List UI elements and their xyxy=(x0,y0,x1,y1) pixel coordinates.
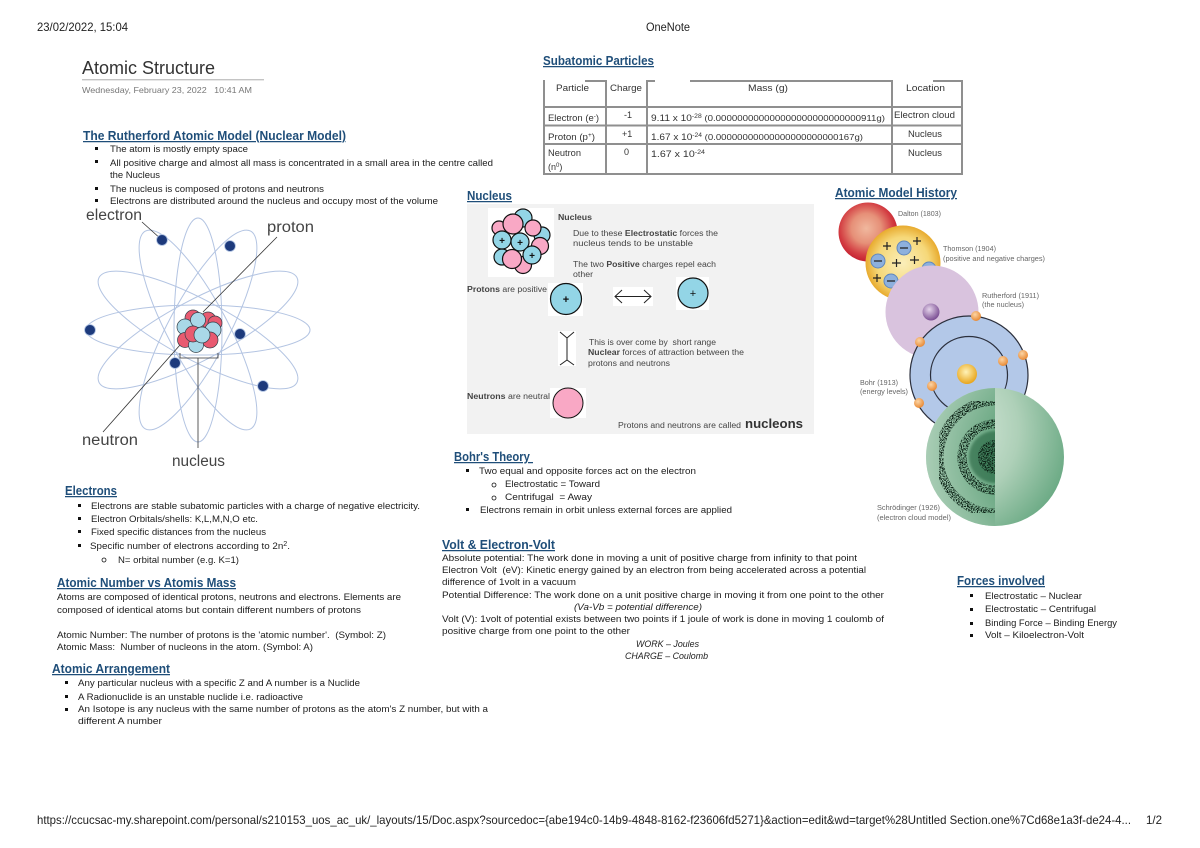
page footer: 1/2 xyxy=(1146,813,1162,827)
table of particles: ) xyxy=(592,132,595,142)
panel: nucleus explanation xyxy=(467,204,814,434)
section: atomic arrangement: A Radionuclide is an unstable nuclide i.e. radioactive xyxy=(78,692,303,703)
icon: nucleus cluster: + xyxy=(499,236,505,247)
page header: 23/02/2022, 15:04 xyxy=(37,20,128,34)
table of particles: (0.00000000000000000000000167g) xyxy=(702,132,863,142)
model captions: Schrödinger (1926) xyxy=(877,505,940,512)
section: forces involved: Volt – Kiloelectron-Volt xyxy=(985,630,1084,641)
section: Bohr's theory: Two equal and opposite forces act on the electron xyxy=(479,466,696,477)
title xyxy=(82,58,264,95)
icon: proton right xyxy=(676,277,709,310)
section: atomic number vs mass: composed of identical atoms but contain different numbers of protons xyxy=(57,605,361,616)
section: electrons: . xyxy=(287,541,290,552)
model captions: (positive and negative charges) xyxy=(943,256,1045,263)
table of particles: Proton (p xyxy=(548,132,585,142)
section: volt and electron-volt: Volt & Electron-Volt xyxy=(442,538,556,552)
table of particles: (n xyxy=(548,162,556,172)
table of particles: + xyxy=(588,133,592,139)
page header: OneNote xyxy=(646,20,690,34)
section: electrons: Specific number of electrons according to 2n xyxy=(90,541,279,552)
model captions: Dalton (1803) xyxy=(898,211,941,218)
table of particles: - xyxy=(594,114,596,120)
table of particles: 0 xyxy=(624,147,629,157)
model captions: (electron cloud model) xyxy=(877,515,951,522)
table of particles: Particle xyxy=(556,83,589,93)
heading: nucleus: Nucleus xyxy=(467,189,512,203)
diagram: atom with orbits: neutron xyxy=(82,432,138,449)
table of particles: (0.000000000000000000000000000911g) xyxy=(702,113,885,123)
panel: nucleus explanation: nucleons xyxy=(745,416,803,431)
section: electrons: Fixed specific distances from the nucleus xyxy=(91,527,266,538)
section: atomic number vs mass: Atomic Mass: Number of nucleons in the atom. (Symbol: A) xyxy=(57,642,313,653)
table of particles: -1 xyxy=(624,110,632,120)
diagram: atom with orbits: nucleus xyxy=(172,453,225,470)
section: subatomic particles xyxy=(543,54,962,175)
table of particles: Nucleus xyxy=(908,148,943,158)
table of particles: ) xyxy=(596,113,599,123)
section: electrons xyxy=(65,484,420,566)
section: atomic number vs mass: Atomic Number: The number of protons is the 'atomic number'. (Symbol: Z) xyxy=(57,630,386,641)
panel: nucleus explanation: Due to these Electrostatic forces the xyxy=(573,229,719,238)
Bohr sphere xyxy=(910,311,1028,434)
section: electrons: 2 xyxy=(283,541,287,548)
table of particles: -24 xyxy=(692,133,703,139)
table of particles: +1 xyxy=(622,129,632,139)
panel: nucleus explanation: Neutrons are neutral xyxy=(467,392,550,401)
table of particles: Location xyxy=(906,83,945,93)
diagram: atom with orbits: electron xyxy=(86,207,142,224)
model captions: Rutherford (1911) xyxy=(982,293,1039,300)
table of particles: Electron (e xyxy=(548,113,592,123)
section: Rutherford atomic model: The nucleus is composed of protons and neutrons xyxy=(110,184,324,195)
section: volt and electron-volt xyxy=(442,538,885,662)
table of particles: ) xyxy=(559,162,562,172)
section: Rutherford atomic model: the Nucleus xyxy=(110,170,160,181)
section: atomic number vs mass: Atoms are composed of identical protons, neutrons and electrons. Elements are xyxy=(57,592,401,603)
section: volt and electron-volt: CHARGE – Coulomb xyxy=(625,651,709,662)
model captions: (energy levels) xyxy=(860,389,908,396)
model captions: (the nucleus) xyxy=(982,302,1024,309)
table of particles: Neutron xyxy=(548,148,581,158)
diagram: atom with orbits xyxy=(82,207,314,470)
section: electrons: Electrons xyxy=(65,484,117,498)
section: atomic arrangement: Atomic Arrangement xyxy=(52,662,171,676)
Rutherford sphere xyxy=(886,266,978,358)
model captions: Thomson (1904) xyxy=(943,246,996,253)
arrow: repulsion xyxy=(613,287,653,306)
Dalton sphere xyxy=(838,202,898,262)
section: atomic arrangement: Any particular nucleus with a specific Z and A number is a Nuclide xyxy=(78,678,360,689)
section: atomic arrangement: An Isotope is any nucleus with the same number of protons as the atom's Z number, but with a xyxy=(78,704,489,715)
table of particles: -28 xyxy=(692,114,702,120)
section: forces involved: Forces involved xyxy=(957,574,1045,588)
section: atomic arrangement: different A number xyxy=(78,716,163,727)
section: Rutherford atomic model: Electrons are distributed around the nucleus and occupy most of the volume xyxy=(110,196,438,207)
section: atomic arrangement xyxy=(52,662,489,727)
table of particles: Nucleus xyxy=(908,129,943,139)
arrow: nuclear attraction xyxy=(558,331,576,366)
section: Bohr's theory: Electrons remain in orbit unless external forces are applied xyxy=(480,505,732,516)
section: Rutherford atomic model: The atom is mostly empty space xyxy=(110,144,248,155)
panel: nucleus explanation: Nucleus xyxy=(558,213,593,222)
title: Wednesday, February 23, 2022 10:41 AM xyxy=(82,85,252,95)
model captions xyxy=(860,211,1045,522)
icon: nucleus cluster: + xyxy=(529,251,535,262)
model captions: Bohr (1913) xyxy=(860,380,898,387)
table of particles: 0 xyxy=(556,163,560,169)
icon: nucleus cluster xyxy=(488,208,554,277)
table of particles xyxy=(544,80,962,175)
section: volt and electron-volt: Potential Difference: The work done on a unit positive charge in moving it from one point to the other xyxy=(442,590,885,601)
table of particles: 9.11 x 10 xyxy=(651,113,687,123)
section: forces involved: Binding Force – Binding Energy xyxy=(985,618,1117,629)
panel: nucleus explanation: Protons are positive xyxy=(467,285,548,294)
page header xyxy=(37,20,690,34)
section: volt and electron-volt: (Va-Vb = potential difference) xyxy=(574,602,702,613)
section: Rutherford atomic model xyxy=(83,129,493,207)
panel: nucleus explanation: other xyxy=(573,270,593,279)
section: atomic model history: Atomic Model History xyxy=(835,186,957,200)
section: forces involved: Electrostatic – Nuclear xyxy=(985,591,1083,602)
section: electrons: Electron Orbitals/shells: K,L,M,N,O etc. xyxy=(91,514,258,525)
page footer: https://ccucsac-my.sharepoint.com/personal/s210153_uos_ac_uk/_layouts/15/Doc.aspx?sourcedoc={abe194c0-14b9-4848-8162-f23606fd5271}&action=edit&wd=target%28Untitled Section.one%7Cd68e1a3f-de24-4... xyxy=(37,813,1131,827)
table of particles: 1.67 x 10 xyxy=(651,132,688,142)
section: Rutherford atomic model: All positive charge and almost all mass is concentrated in a small area in the centre called xyxy=(110,158,493,169)
title: Atomic Structure xyxy=(82,58,215,78)
section: atomic number vs mass xyxy=(57,576,401,653)
section: volt and electron-volt: difference of 1volt in a vacuum xyxy=(442,577,576,588)
panel: nucleus explanation: Protons and neutrons are called xyxy=(618,421,741,430)
section: volt and electron-volt: WORK – Joules xyxy=(636,639,699,650)
Schrodinger sphere xyxy=(926,388,1064,526)
panel: nucleus explanation: protons and neutrons xyxy=(588,359,670,368)
section: atomic number vs mass: Atomic Number vs Atomis Mass xyxy=(57,576,236,590)
icon: nucleus cluster: + xyxy=(517,238,523,249)
table of particles: Electron cloud xyxy=(894,110,955,120)
table of particles: Charge xyxy=(610,83,642,93)
icon: proton left xyxy=(548,283,583,316)
section: electrons: Electrons are stable subatomic particles with a charge of negative electricity. xyxy=(91,501,420,512)
section: volt and electron-volt: positive charge from one point to the other xyxy=(442,626,631,637)
section: Rutherford atomic model: The Rutherford Atomic Model (Nuclear Model) xyxy=(83,129,346,143)
table of particles: -24 xyxy=(695,150,706,156)
panel: nucleus explanation: Nuclear forces of attraction between the xyxy=(588,348,745,357)
icon: proton right: + xyxy=(690,288,696,300)
section: Bohr's theory xyxy=(454,450,732,516)
section: forces involved xyxy=(957,574,1117,641)
section: Bohr's theory: Centrifugal = Away xyxy=(505,492,592,503)
section: volt and electron-volt: Electron Volt (eV): Kinetic energy gained by an electron from being accelerated across a potential xyxy=(442,565,866,576)
Thomson sphere xyxy=(866,226,940,300)
section: atomic model history xyxy=(835,186,1064,526)
section: subatomic particles: Subatomic Particles xyxy=(543,54,654,68)
section: forces involved: Electrostatic – Centrifugal xyxy=(985,604,1096,615)
section: electrons: N= orbital number (e.g. K=1) xyxy=(118,555,239,566)
section: volt and electron-volt: Absolute potential: The work done in moving a unit of positive charge from infinity to that point xyxy=(442,553,857,564)
icon: neutron xyxy=(550,388,586,418)
panel: nucleus explanation: nucleus tends to be unstable xyxy=(573,239,694,248)
panel: nucleus explanation: The two Positive charges repel each xyxy=(573,260,716,269)
section: volt and electron-volt: Volt (V): 1volt of potential exists between two points if 1 joule of work is done in moving 1 coulomb of xyxy=(442,614,884,625)
panel: nucleus explanation: This is over come by short range xyxy=(589,338,717,347)
table of particles: 1.67 x 10 xyxy=(651,149,688,159)
diagram: atom with orbits: proton xyxy=(267,219,314,236)
section: Bohr's theory: Electrostatic = Toward xyxy=(505,479,600,490)
table of particles: Mass (g) xyxy=(748,83,788,93)
icon: proton left: + xyxy=(563,294,569,306)
section: Bohr's theory: Bohr's Theory xyxy=(454,450,533,464)
